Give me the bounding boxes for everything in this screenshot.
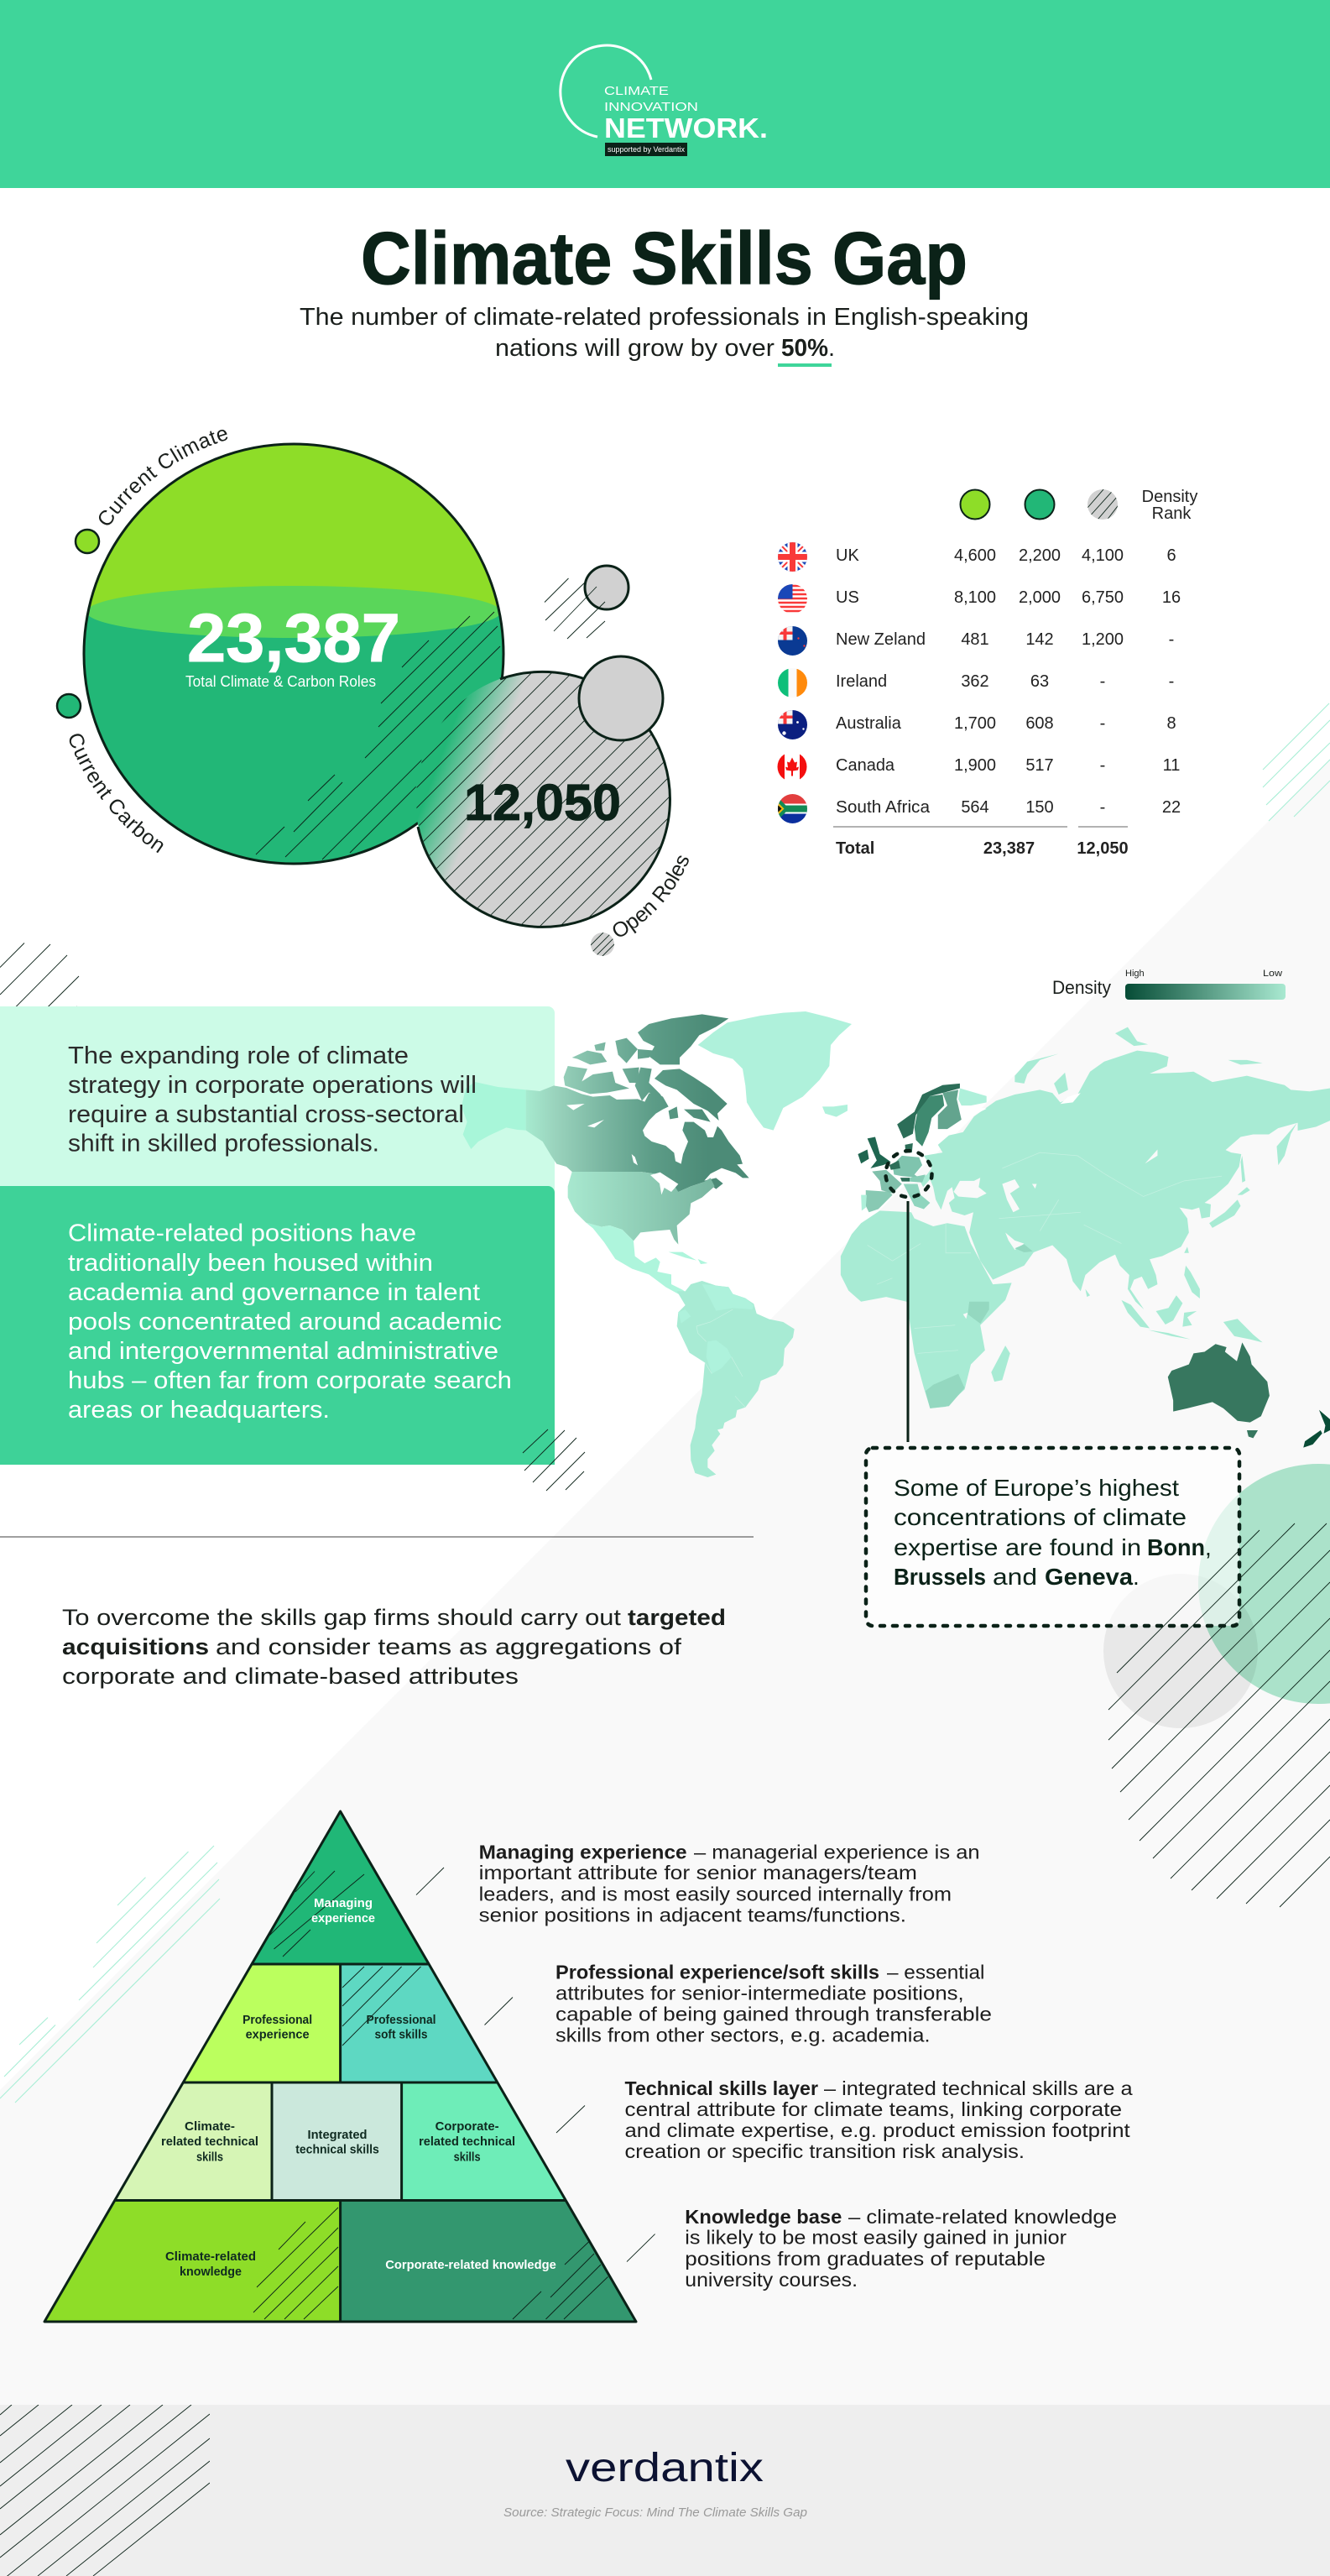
skills pyramid bbox=[44, 1811, 636, 2322]
density table bbox=[777, 483, 1197, 858]
pyramid: managing experience: experience bbox=[311, 1911, 375, 1925]
title: Climate Skills Gap bbox=[361, 217, 968, 300]
callout: European hubs: and bbox=[993, 1564, 1037, 1590]
callout: European hubs: Brussels bbox=[894, 1564, 986, 1590]
description: knowledge base: Knowledge base bbox=[685, 2206, 842, 2228]
description: professional experience and soft skills: skills from other sectors, e.g. academia. bbox=[555, 2025, 930, 2046]
map: USA bbox=[568, 1172, 715, 1245]
row: Canada: 517 bbox=[1025, 756, 1054, 775]
callout: European hubs: , bbox=[1205, 1534, 1212, 1560]
description: professional experience and soft skills: capable of being gained through transferable bbox=[555, 2004, 992, 2025]
row: New Zealand: 1,200 bbox=[1082, 630, 1124, 649]
logo: Climate Innovation Network bbox=[561, 45, 768, 156]
row: Ireland bbox=[836, 672, 1174, 691]
text: expanding role of climate strategy: The expanding role of climate bbox=[68, 1042, 409, 1069]
flag: Canada bbox=[777, 754, 807, 779]
row: UK: 4,100 bbox=[1082, 546, 1124, 565]
row: US: US bbox=[836, 588, 859, 607]
row: Ireland: Ireland bbox=[836, 672, 887, 691]
row: Australia: 1,700 bbox=[954, 714, 996, 733]
legend label: current climate: Current Climate bbox=[99, 430, 228, 525]
panel: climate-related positions: areas or headquarters. bbox=[68, 1397, 330, 1424]
row: US: 6,750 bbox=[1082, 588, 1124, 607]
logo: verdantix: verdantix bbox=[566, 2446, 764, 2490]
row: Australia: Australia bbox=[836, 714, 902, 733]
description: knowledge base: university courses. bbox=[685, 2269, 858, 2291]
map: Iceland bbox=[822, 1105, 848, 1117]
flag: UK bbox=[777, 542, 807, 572]
description: managing experience: Managing experience bbox=[479, 1842, 687, 1863]
intro text: overcoming the skills gap: and consider teams as aggregations of bbox=[216, 1634, 682, 1659]
panel: climate-related positions bbox=[0, 1186, 555, 1465]
row: totals: 12,050 bbox=[1077, 839, 1129, 858]
row: UK bbox=[836, 546, 1176, 565]
pyramid: professional soft skills: soft skills bbox=[374, 2028, 428, 2042]
gray circle: open roles bbox=[416, 670, 671, 928]
row: UK: UK bbox=[836, 546, 859, 565]
map: South Africa bbox=[926, 1374, 965, 1408]
row: US bbox=[836, 588, 1181, 607]
flag: Ireland bbox=[777, 668, 807, 698]
callout: European hubs: Geneva bbox=[1045, 1564, 1133, 1590]
pyramid: professional experience bbox=[183, 1964, 341, 2082]
map: Madagascar bbox=[991, 1345, 1010, 1382]
row: Ireland: 362 bbox=[961, 672, 989, 691]
row: South Africa bbox=[836, 798, 1181, 817]
big circle: total climate and carbon roles bbox=[76, 436, 512, 864]
map: Southeast Asia bbox=[1121, 1266, 1263, 1342]
legend label: current carbon: Current Carbon bbox=[69, 734, 163, 853]
pyramid: corporate-related technical skills: skills bbox=[454, 2150, 481, 2164]
row: Canada bbox=[836, 756, 1180, 775]
North America bbox=[462, 1011, 852, 1294]
pyramid: climate-related knowledge: Climate-related bbox=[165, 2249, 256, 2264]
panel: climate-related positions: hubs – often far from corporate search bbox=[68, 1367, 512, 1394]
description: knowledge base: – climate-related knowledge bbox=[848, 2206, 1117, 2228]
pyramid: integrated technical skills bbox=[272, 2082, 402, 2201]
text: expanding role of climate strategy: strategy in corporate operations will bbox=[68, 1072, 477, 1099]
pyramid: climate-related technical skills: skills bbox=[196, 2150, 223, 2164]
row: Australia: 608 bbox=[1025, 714, 1054, 733]
row: US: 8,100 bbox=[954, 588, 996, 607]
density legend bbox=[1052, 969, 1286, 1000]
row: South Africa: 564 bbox=[961, 798, 989, 817]
pyramid: climate-related technical skills: Climate- bbox=[185, 2119, 235, 2134]
map: New Zealand bbox=[1303, 1410, 1330, 1448]
panel: climate-related positions: Climate-related positions have bbox=[68, 1220, 416, 1247]
description: knowledge base: is likely to be most easily gained in junior bbox=[685, 2227, 1067, 2249]
text: expanding role of climate strategy bbox=[68, 1042, 477, 1157]
logo: Climate Innovation Network: CLIMATE bbox=[604, 84, 669, 98]
map: Western Europe bbox=[858, 1136, 930, 1212]
pyramid: integrated technical skills: technical skills bbox=[295, 2143, 379, 2157]
row: Canada: 1,900 bbox=[954, 756, 996, 775]
description: technical skills layer: – integrated technical skills are a bbox=[824, 2077, 1133, 2099]
pyramid: professional soft skills bbox=[341, 1964, 498, 2082]
description: managing experience: leaders, and is most easily sourced internally from bbox=[479, 1884, 952, 1905]
subtitle bbox=[300, 304, 1029, 367]
row: Australia: 8 bbox=[1166, 714, 1176, 733]
row: US: 16 bbox=[1162, 588, 1181, 607]
panel: climate-related positions: and intergovernmental administrative bbox=[68, 1338, 498, 1365]
map: Arctic islands bbox=[1014, 1027, 1263, 1095]
map: Africa bbox=[841, 1210, 1012, 1408]
row: Australia: - bbox=[1100, 714, 1105, 733]
description: technical skills layer bbox=[624, 2077, 1133, 2162]
logo: Climate Innovation Network: INNOVATION bbox=[604, 100, 698, 114]
callout: European hubs bbox=[866, 1448, 1239, 1626]
row: Australia bbox=[836, 714, 1176, 733]
small gray bubble bbox=[585, 566, 628, 609]
panel: climate-related positions: academia and governance in talent bbox=[68, 1279, 480, 1306]
description: professional experience and soft skills: – essential bbox=[887, 1961, 984, 1983]
panel: climate-related positions: traditionally been housed within bbox=[68, 1250, 433, 1277]
map: Greenland bbox=[698, 1011, 852, 1131]
map: South America bbox=[677, 1281, 795, 1477]
map: Australia bbox=[1168, 1342, 1270, 1423]
pyramid: corporate-related technical skills bbox=[402, 2082, 566, 2201]
header band with logo bbox=[0, 0, 1330, 188]
row: Canada: 11 bbox=[1163, 756, 1180, 775]
intro text: overcoming the skills gap: acquisitions bbox=[62, 1634, 209, 1659]
map: Scandinavia bbox=[897, 1084, 987, 1152]
legend label: current carbon bbox=[55, 693, 163, 853]
intro text: overcoming the skills gap: targeted bbox=[628, 1605, 726, 1630]
source note: Source: Strategic Focus: Mind The Climate Skills Gap bbox=[503, 2505, 807, 2520]
logo: Climate Innovation Network: supported by Verdantix bbox=[608, 145, 685, 154]
flag: Australia bbox=[777, 710, 807, 740]
map: Alaska bbox=[462, 1082, 526, 1149]
description: professional experience and soft skills: attributes for senior-intermediate positions, bbox=[555, 1982, 964, 2004]
description: technical skills layer: central attribute for climate teams, linking corporate bbox=[624, 2098, 1122, 2120]
description: technical skills layer: creation or specific transition risk analysis. bbox=[624, 2140, 1025, 2162]
map: Canada bbox=[526, 1014, 749, 1194]
table header: legend dots and density rank bbox=[960, 489, 1198, 520]
callout: European hubs: concentrations of climate bbox=[894, 1504, 1187, 1530]
map: Kenya bbox=[968, 1302, 989, 1324]
pyramid: integrated technical skills: Integrated bbox=[307, 2128, 368, 2142]
row: South Africa: 22 bbox=[1162, 798, 1181, 817]
callout: European hubs: Some of Europe’s highest bbox=[894, 1475, 1179, 1501]
row: Canada: Canada bbox=[836, 756, 895, 775]
description: knowledge base: positions from graduates of reputable bbox=[685, 2248, 1046, 2270]
logo: Climate Innovation Network: NETWORK. bbox=[604, 112, 768, 144]
flag: US bbox=[777, 584, 807, 614]
row: New Zealand: - bbox=[1169, 630, 1174, 649]
description: technical skills layer: Technical skills layer bbox=[624, 2077, 818, 2099]
pyramid: corporate-related knowledge bbox=[341, 2201, 636, 2322]
map: Oman bbox=[1014, 1244, 1033, 1252]
row: UK: 4,600 bbox=[954, 546, 996, 565]
row: New Zealand bbox=[836, 630, 1174, 649]
density legend: Low bbox=[1263, 969, 1282, 979]
subtitle: nations will grow by over bbox=[495, 335, 775, 362]
diagonal background panel bbox=[0, 760, 1330, 2405]
description: technical skills layer: and climate expertise, e.g. product emission footprint bbox=[624, 2119, 1130, 2141]
flag: New Zealand bbox=[777, 626, 807, 656]
row: UK: 2,200 bbox=[1019, 546, 1061, 565]
world density map bbox=[462, 1011, 1330, 1477]
row: New Zealand: New Zeland bbox=[836, 630, 926, 649]
pyramid: professional experience: Professional bbox=[243, 2013, 312, 2027]
pyramid: corporate-related knowledge: Corporate-related knowledge bbox=[385, 2258, 556, 2272]
Eurasia, Africa and Oceania bbox=[841, 1027, 1330, 1448]
description: managing experience: important attribute for senior managers/team bbox=[479, 1862, 917, 1884]
density legend: High bbox=[1125, 969, 1145, 979]
panel: expanding role background bbox=[0, 1006, 555, 1200]
pyramid: managing experience bbox=[252, 1811, 429, 1964]
pyramid: professional soft skills: Professional bbox=[366, 2013, 436, 2027]
row: totals: Total bbox=[836, 839, 874, 858]
pyramid: climate-related technical skills: related technical bbox=[161, 2134, 258, 2149]
table header: legend dots and density rank: Density bbox=[1142, 488, 1197, 506]
intro text: overcoming the skills gap: corporate and climate-based attributes bbox=[62, 1664, 519, 1689]
callout: European hubs: . bbox=[1133, 1564, 1140, 1590]
description: knowledge base bbox=[685, 2206, 1117, 2291]
text: expanding role of climate strategy: shift in skilled professionals. bbox=[68, 1130, 379, 1157]
intro text: overcoming the skills gap: To overcome the skills gap firms should carry out bbox=[62, 1605, 622, 1630]
row: South Africa: - bbox=[1100, 798, 1105, 817]
gray bubble top bbox=[579, 656, 663, 740]
flag: South Africa bbox=[777, 794, 807, 824]
callout: European hubs: Bonn bbox=[1147, 1534, 1205, 1560]
subtitle: The number of climate-related professionals in English-speaking bbox=[300, 304, 1029, 331]
row: Ireland: - bbox=[1169, 672, 1174, 691]
decorative circles behind callout bbox=[1103, 1464, 1330, 1728]
subtitle: . bbox=[828, 335, 835, 362]
legend label: current climate bbox=[74, 430, 228, 554]
row: Ireland: 63 bbox=[1030, 672, 1049, 691]
row: UK: 6 bbox=[1166, 546, 1176, 565]
pyramid: corporate-related technical skills: related technical bbox=[419, 2134, 515, 2149]
row: US: 2,000 bbox=[1019, 588, 1061, 607]
big number 12,050: 12,050 bbox=[464, 774, 621, 831]
description: professional experience and soft skills: Professional experience/soft skills bbox=[555, 1961, 879, 1983]
description: managing experience: senior positions in adjacent teams/functions. bbox=[479, 1904, 906, 1925]
subtitle: 50% bbox=[781, 335, 828, 362]
text: expanding role of climate strategy: require a substantial cross-sectoral bbox=[68, 1101, 464, 1128]
pyramid: professional experience: experience bbox=[246, 2028, 310, 2042]
row: New Zealand: 142 bbox=[1025, 630, 1054, 649]
footer band bbox=[0, 2405, 1330, 2576]
europe highlight circle and connector bbox=[886, 1151, 931, 1442]
row: Canada: - bbox=[1100, 756, 1105, 775]
caption: total climate and carbon roles: Total Climate & Carbon Roles bbox=[185, 673, 376, 690]
row: South Africa: 150 bbox=[1025, 798, 1054, 817]
map: Eurasia bbox=[919, 1051, 1330, 1309]
row: South Africa: South Africa bbox=[836, 798, 931, 817]
description: managing experience bbox=[479, 1842, 980, 1925]
pyramid: climate-related technical skills bbox=[115, 2082, 272, 2201]
map: Japan and east Asian islands bbox=[1085, 1123, 1297, 1297]
row: New Zealand: 481 bbox=[961, 630, 989, 649]
legend label: open roles bbox=[591, 856, 689, 956]
table header: legend dots and density rank: Rank bbox=[1152, 504, 1192, 523]
map: Mexico and Central America bbox=[586, 1223, 707, 1294]
description: managing experience: – managerial experience is an bbox=[694, 1842, 980, 1863]
pyramid: climate-related knowledge: knowledge bbox=[180, 2265, 242, 2279]
pyramid: corporate-related technical skills: Corporate- bbox=[436, 2119, 499, 2134]
row: Ireland: - bbox=[1100, 672, 1105, 691]
callout: European hubs: expertise are found in bbox=[894, 1534, 1141, 1560]
pyramid: managing experience: Managing bbox=[314, 1896, 373, 1910]
big number 23,387: 23,387 bbox=[187, 600, 400, 677]
row: totals bbox=[836, 839, 1129, 858]
bubble chart: total roles and open roles bbox=[55, 430, 689, 956]
legend label: open roles: Open Roles bbox=[613, 856, 689, 937]
panel: climate-related positions: pools concentrated around academic bbox=[68, 1309, 502, 1335]
description: professional experience and soft skills bbox=[555, 1961, 992, 2046]
intro text: overcoming the skills gap bbox=[62, 1605, 726, 1689]
pyramid: climate-related knowledge bbox=[44, 2201, 341, 2322]
density legend: Density bbox=[1052, 977, 1111, 998]
row: totals: 23,387 bbox=[983, 839, 1035, 858]
